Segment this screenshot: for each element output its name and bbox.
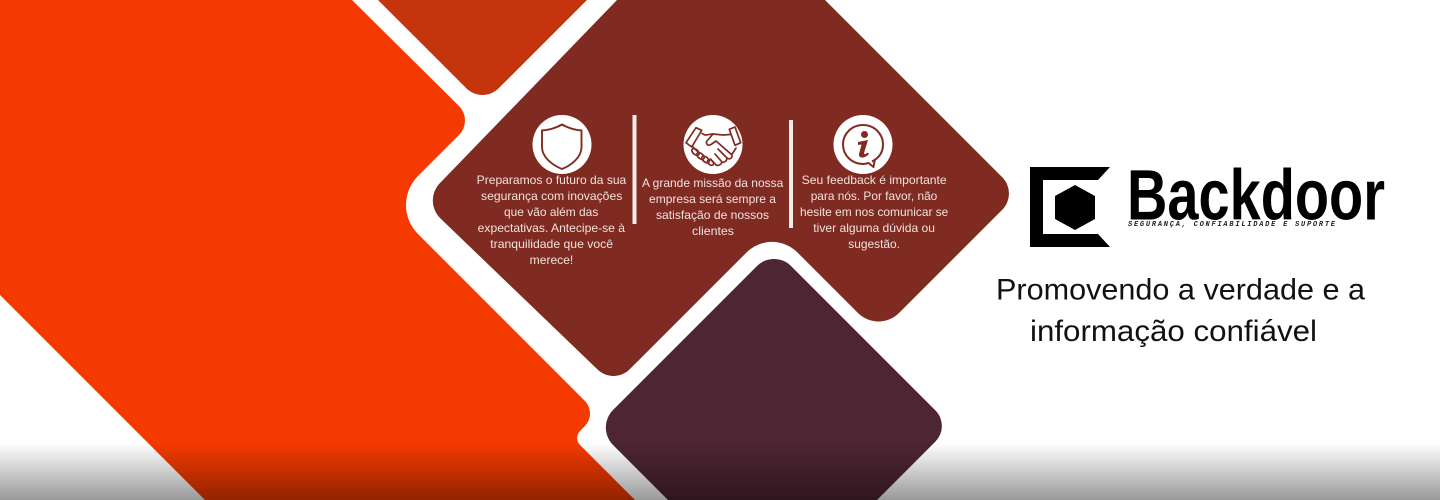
text: security description: segurança com inovações [481,189,622,203]
text: mission description: clientes [692,224,734,238]
text: security description: que vão além das [504,205,598,219]
headline [996,274,1365,348]
logo: Backdoor [1030,156,1385,247]
text: mission description: A grande missão da nossa [642,176,784,190]
text: security description: tranquilidade que você [490,237,613,251]
divider bar 2 [789,120,793,228]
divider bar 1 [632,115,636,224]
icon: info speech bubble [834,115,892,174]
column: mission [642,115,784,238]
text: security description: expectativas. Antecipe-se à [478,221,625,235]
text: security description: Preparamos o futuro da sua [477,173,627,187]
orange background shape [0,0,635,500]
icon: handshake [684,115,742,174]
top red diamond [378,0,587,95]
text: feedback description: tiver alguma dúvida ou [813,221,935,235]
text: feedback description [800,173,949,251]
text: mission description [642,176,784,238]
dark plum diamond [606,259,942,500]
icon: shield [532,115,592,174]
text: feedback description: Seu feedback é importante [802,173,947,187]
column: feedback [800,115,949,251]
text: security description: merece! [530,253,573,267]
bottom gradient fade [0,443,1440,500]
column: security [477,115,627,267]
text: feedback description: sugestão. [848,237,900,251]
text: feedback description: hesite em nos comunicar se [800,205,949,219]
icon: logo mark [1030,167,1110,247]
headline: informação confiável [1030,315,1317,348]
logo tagline: SEGURANÇA, CONFIABILIDADE E SUPORTE [1128,221,1336,229]
text: mission description: satisfação de nossos [656,208,769,222]
text: feedback description: para nós. Por favor, não [811,189,938,203]
text: mission description: empresa será sempre a [649,192,776,206]
headline: Promovendo a verdade e a [996,274,1365,306]
panel: brown diamond [433,0,1009,376]
text: security description [477,173,627,267]
